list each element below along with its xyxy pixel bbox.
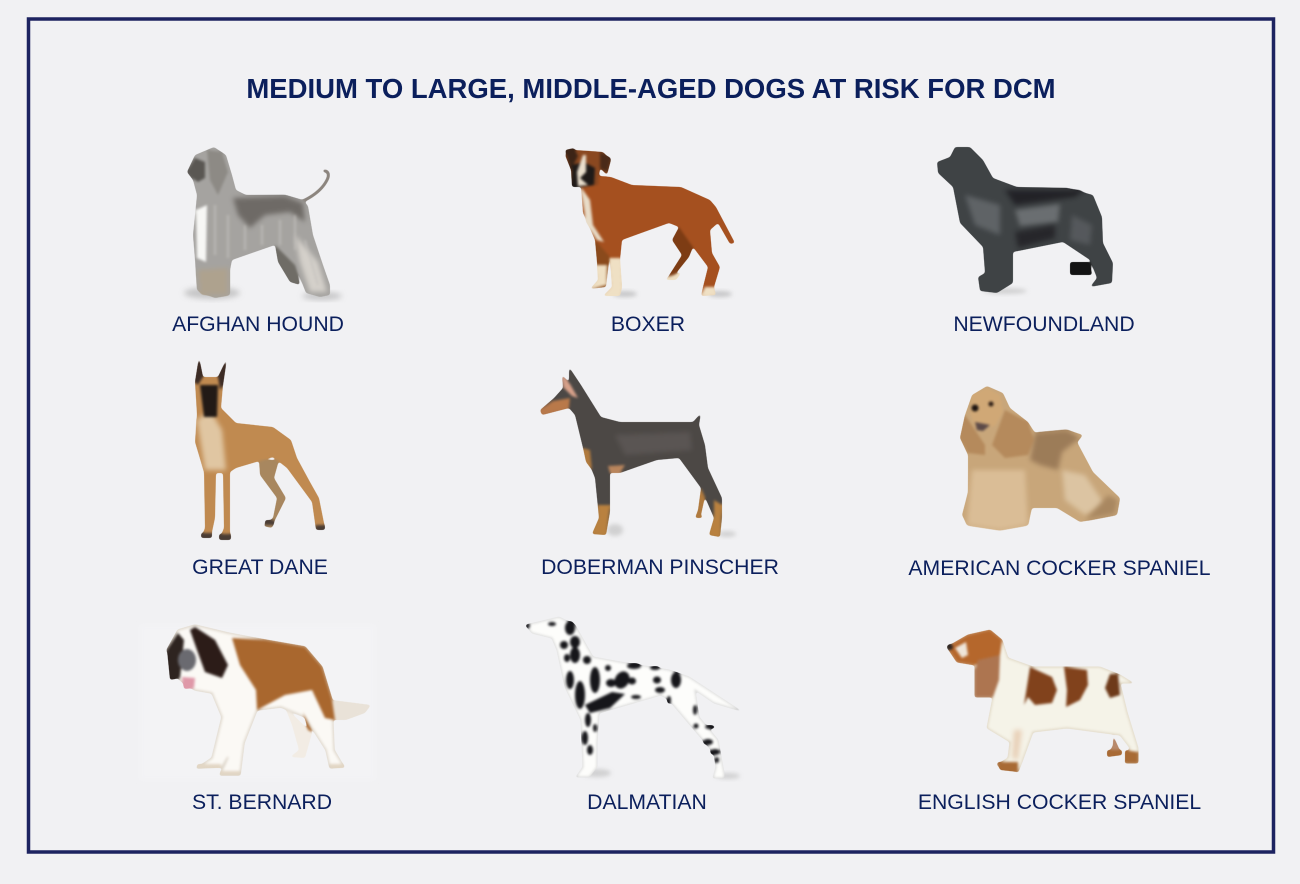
dog: Dalmatian bbox=[526, 617, 741, 779]
dog: St. Bernard bbox=[140, 625, 375, 780]
label: Newfoundland: NEWFOUNDLAND bbox=[953, 313, 1135, 336]
dog: Boxer bbox=[565, 148, 735, 297]
dog: Newfoundland bbox=[937, 147, 1113, 294]
label: St. Bernard: ST. BERNARD bbox=[192, 791, 332, 814]
label: Doberman Pinscher: DOBERMAN PINSCHER bbox=[541, 556, 779, 579]
label: Boxer: BOXER bbox=[611, 313, 685, 336]
dog: English Cocker Spaniel bbox=[947, 630, 1138, 772]
dog: American Cocker Spaniel bbox=[960, 386, 1120, 530]
dog: Great Dane bbox=[195, 357, 325, 540]
label: English Cocker Spaniel: ENGLISH COCKER SPANIEL bbox=[918, 791, 1201, 814]
dog: Afghan Hound bbox=[184, 147, 342, 300]
label: Dalmatian: DALMATIAN bbox=[587, 791, 707, 814]
label: Afghan Hound: AFGHAN HOUND bbox=[172, 313, 344, 336]
label: American Cocker Spaniel: AMERICAN COCKER SPANIEL bbox=[908, 557, 1211, 580]
title: MEDIUM TO LARGE, MIDDLE-AGED DOGS AT RISK FOR DCM bbox=[246, 73, 1056, 104]
dog: Doberman Pinscher bbox=[540, 367, 736, 537]
label: Great Dane: GREAT DANE bbox=[192, 556, 328, 579]
